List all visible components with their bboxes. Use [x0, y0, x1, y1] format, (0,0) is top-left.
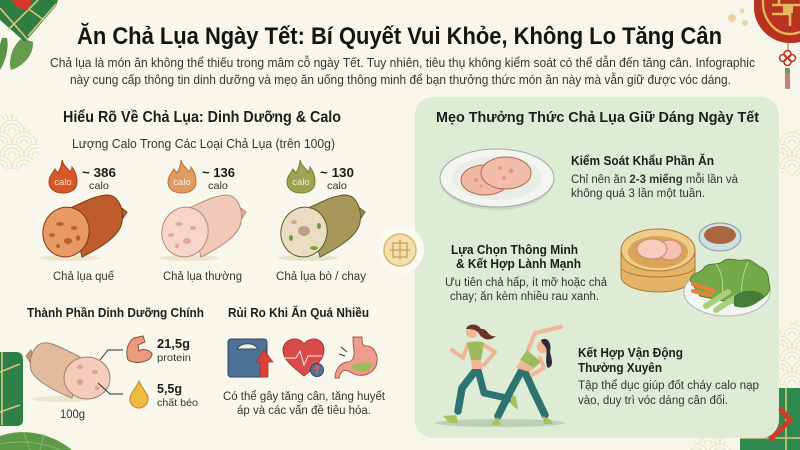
heading: nutrition: Hiểu Rõ Về Chả Lụa: Dinh Dưỡng & Calo — [63, 109, 341, 126]
sauce bowl — [699, 223, 741, 251]
tip text: Ưu tiên chả hấp, ít mỡ hoặc chả — [445, 277, 608, 289]
intro text: Chả lụa là món ăn không thể thiếu trong mâm cỗ ngày Tết. Tuy nhiên, tiêu thụ không kiểm soát có thể dẫn đến tăng cân. Infographic — [50, 55, 755, 70]
icon: red flame: calo — [54, 177, 72, 188]
panel: nutrition and calories — [37, 109, 366, 283]
label: 100g: 100g — [60, 409, 85, 421]
stretching woman — [490, 327, 561, 425]
icon: weight scale with up arrow — [228, 339, 273, 377]
panel: risks — [223, 305, 386, 417]
calorie value 130: calo — [327, 180, 347, 192]
icon: muscle arm — [127, 336, 152, 362]
tip: regular exercise — [435, 324, 759, 427]
red ribbon chevron on panel corner — [770, 408, 790, 440]
top-right lantern decoration — [728, 0, 800, 89]
icon: oil drop — [130, 381, 148, 408]
tip text: Chỉ nên ăn 2-3 miếng mỗi lần và — [571, 173, 739, 186]
label: Chả lụa quế — [53, 271, 115, 283]
subheading: calories per 100g: Lượng Calo Trong Các Loại Chả Lụa (trên 100g) — [72, 137, 335, 151]
bottom-left banh chung decoration — [0, 352, 72, 450]
tip text: Kết Hợp Vận Động — [578, 346, 683, 360]
tip text — [571, 153, 739, 200]
fat value — [157, 381, 198, 409]
item: cha lua bo chay — [275, 160, 366, 283]
fat value: chất béo — [157, 397, 198, 409]
calorie value 130: ~ 130 — [320, 166, 354, 180]
risk text: Có thể gây tăng cân, tăng huyết — [223, 391, 386, 403]
calorie value 136 — [202, 166, 235, 192]
bottom-right banh chung decoration — [740, 388, 800, 450]
item: cha lua que — [37, 160, 127, 283]
wave pattern left — [0, 114, 38, 170]
sausage: cinnamon — [37, 195, 127, 262]
icon: green flame: calo — [292, 177, 310, 188]
heading: tips: Mẹo Thưởng Thức Chả Lụa Giữ Dáng Ngày Tết — [436, 110, 759, 126]
tip text: không quá 3 lần một tuần. — [571, 188, 705, 200]
label: Chả lụa thường — [163, 271, 242, 283]
protein value — [157, 336, 191, 364]
label: Chả lụa bò / chay — [276, 271, 366, 283]
calorie value 386: ~ 386 — [82, 166, 116, 180]
plate with slices — [440, 149, 554, 210]
tip text: chay; ăn kèm nhiều rau xanh. — [450, 291, 599, 303]
sausage: beef or vegetarian — [275, 195, 365, 262]
wave pattern bottom — [688, 438, 734, 450]
tip text: & Kết Hợp Lành Mạnh — [456, 257, 581, 271]
vegetable plate — [684, 259, 770, 316]
calorie value 136: calo — [208, 180, 228, 192]
wave pattern right — [780, 128, 800, 178]
intro text — [50, 55, 755, 87]
tip text — [578, 346, 759, 407]
leader lines — [98, 350, 123, 394]
calorie value 386 — [82, 166, 116, 192]
tip: smart choices — [445, 223, 770, 316]
tip text: Lựa Chọn Thông Minh — [451, 243, 578, 257]
sausage: 100g — [26, 343, 110, 402]
item: cha lua thuong — [156, 160, 246, 283]
intro text: này cung cấp thông tin dinh dưỡng và mẹo ăn uống thông minh để bạn thưởng thức món ăn này mà vẫn giữ được vóc dáng. — [70, 72, 731, 87]
runner — [443, 324, 518, 423]
title: Ăn Chả Lụa Ngày Tết: Bí Quyết Vui Khỏe, Không Lo Tăng Cân — [77, 22, 722, 50]
panel: main nutrients — [26, 306, 204, 421]
calorie value 386: calo — [89, 180, 109, 192]
calorie value 130 — [320, 166, 354, 192]
wave pattern lower right — [780, 318, 800, 392]
top-left banh chung decoration — [0, 0, 58, 70]
fat value: 5,5g — [157, 381, 182, 396]
protein value: protein — [157, 352, 191, 364]
risk text — [223, 391, 386, 417]
tip text: vào, duy trì vóc dáng cân đối. — [578, 395, 728, 407]
panel background — [415, 97, 779, 438]
protein value: 21,5g — [157, 336, 190, 351]
tip text: Tập thể dục giúp đốt cháy calo nạp — [578, 380, 759, 392]
sausage: regular — [156, 195, 246, 262]
panel: tips — [415, 97, 779, 438]
bamboo steamer — [621, 229, 695, 292]
risk text: áp và các vấn đề tiêu hóa. — [237, 405, 371, 417]
calorie value 136: ~ 136 — [202, 166, 235, 180]
tip: portion control — [440, 149, 739, 210]
icon: stomach — [335, 337, 377, 378]
exercising women illustration — [435, 324, 565, 427]
center medallion — [376, 226, 424, 274]
icon: heart with pulse — [283, 339, 324, 376]
heading: main nutrients: Thành Phần Dinh Dưỡng Chính — [27, 306, 204, 320]
tip text — [445, 243, 608, 303]
heading: risks: Rủi Ro Khi Ăn Quá Nhiều — [228, 305, 369, 320]
tip text: Thường Xuyên — [578, 361, 662, 375]
icon: orange flame: calo — [173, 177, 191, 188]
tip text: Kiểm Soát Khẩu Phần Ăn — [571, 153, 714, 168]
